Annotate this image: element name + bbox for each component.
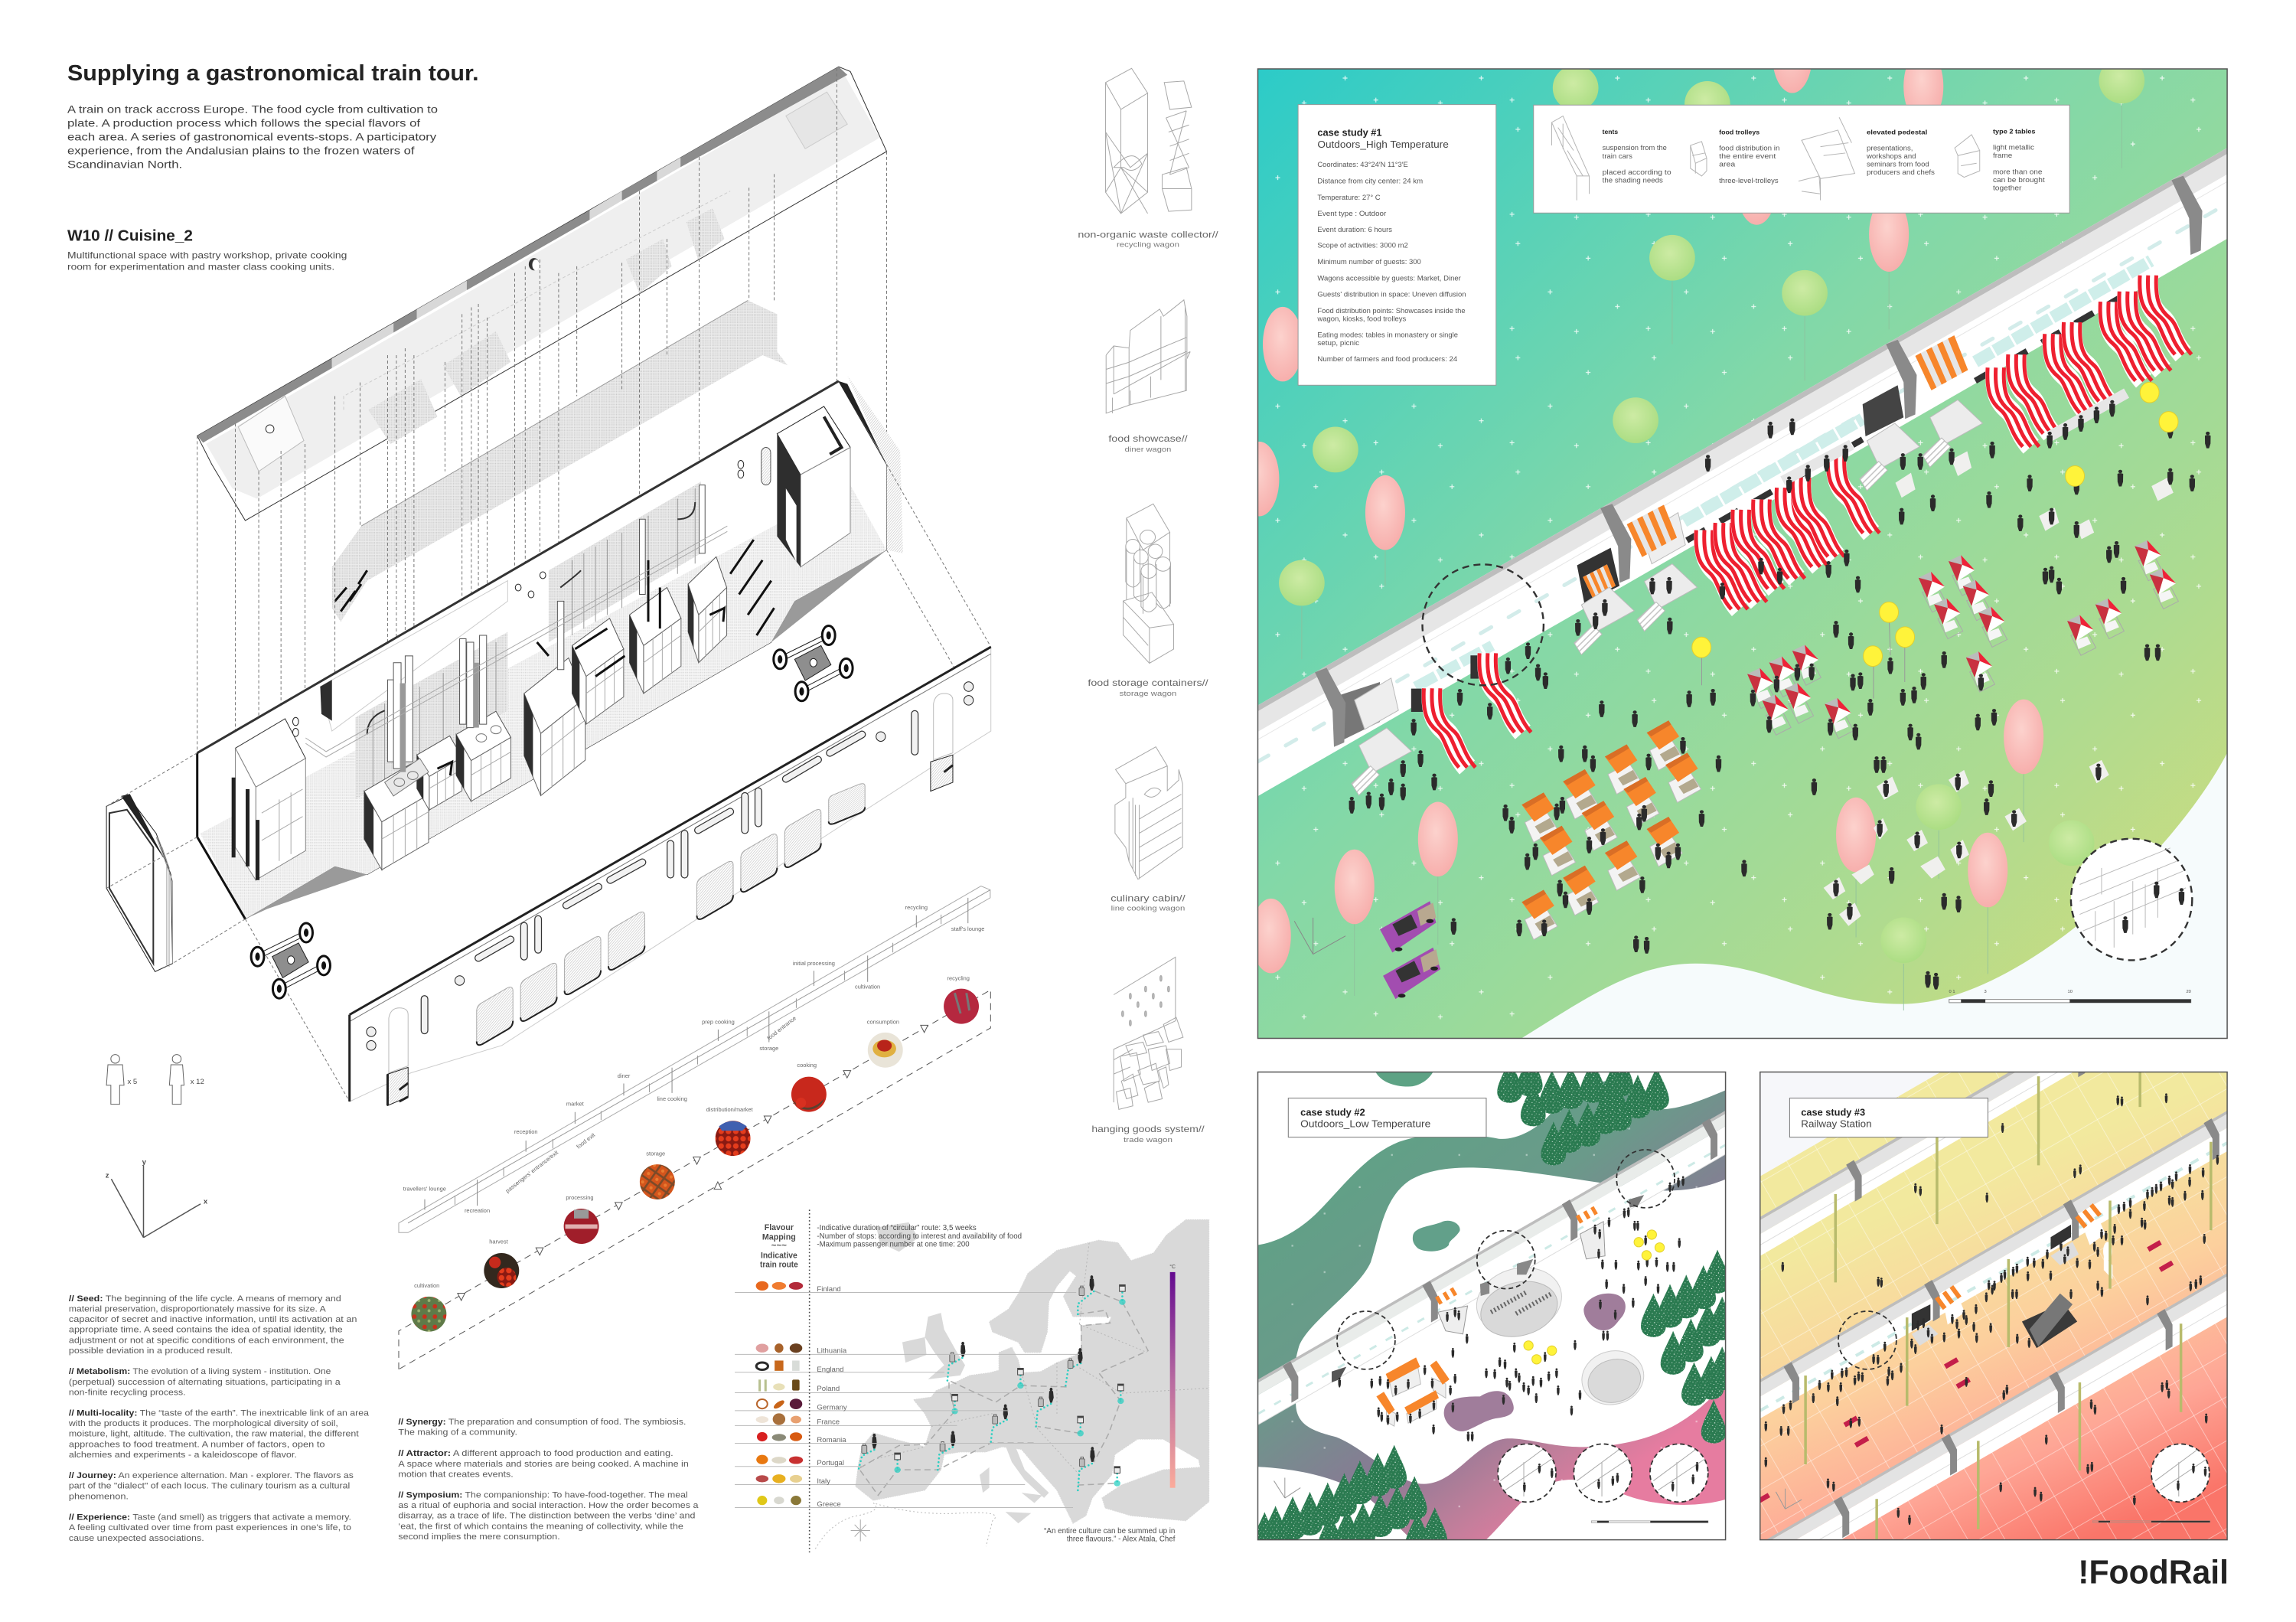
concepts text column 1: appropriate time. A seed contains the idea of spatial identity, the (69, 1326, 343, 1335)
stage: processing (564, 1194, 599, 1244)
balloons (1524, 1230, 1665, 1364)
concepts text column 1: capacitor of secret and inactive information, until its activation at an (69, 1315, 357, 1324)
food cycle path (399, 975, 990, 1369)
item: showcase: diner wagon (1125, 445, 1171, 453)
item: waste collector: recycling wagon (1117, 241, 1179, 249)
stage: processing: processing (566, 1194, 593, 1201)
info card: case study 1: Event duration: 6 hours (1317, 226, 1393, 233)
heading: wagon W10: W10 // Cuisine_2 (67, 228, 193, 245)
scale bar (1592, 1521, 1708, 1522)
long banquet tables (1783, 393, 2127, 481)
item: culinary cabin (1110, 747, 1186, 912)
axes icon: y (142, 1158, 147, 1167)
inset detail (2071, 839, 2192, 960)
item: waste collector: non-organic waste collector// (1078, 230, 1218, 240)
concepts text column 1: part of the "dialect" of each locus. The culinary tourism as a cultural (69, 1482, 350, 1491)
stage: cooking (791, 1062, 827, 1112)
legend card: event components: food trolleys (1719, 128, 1760, 135)
country labels: Lithuania (817, 1347, 847, 1356)
map heading: Mapping (762, 1233, 796, 1242)
country labels: Poland (817, 1385, 840, 1393)
strip labels: recycling (905, 904, 928, 911)
concepts text column 1: A feeling cultivated over time from past experiences in one's life, to (69, 1523, 351, 1532)
legend card: event components: producers and chefs (1867, 168, 1936, 176)
intro text block: A train on track accross Europe. The food cycle from cultivation to (67, 103, 438, 115)
item: culinary cabin: line cooking wagon (1111, 905, 1185, 912)
legend card: event components: three-level-trolleys (1719, 177, 1779, 184)
concepts text column 2: as a ritual of euphoria and social interaction. How the order becomes a (398, 1501, 698, 1510)
end wall (106, 794, 173, 971)
roof shell (197, 67, 886, 521)
concepts text column 1: cause unexpected associations. (69, 1534, 204, 1543)
dashed connection lines (197, 68, 886, 834)
concepts text column 1: material preservation, disproportionately massive for its size. A (69, 1304, 327, 1314)
info card: case study 1 (1298, 105, 1496, 385)
route facts: -Indicative duration of “circular” route: 3,5 weeks (817, 1224, 977, 1232)
row divider lines (735, 1292, 1098, 1508)
station train (1760, 1111, 2227, 1418)
snow ground shapes (1257, 1072, 1725, 1539)
map heading: Flavour (765, 1223, 794, 1232)
info card: case study 2: Outdoors_Low Temperature (1300, 1118, 1430, 1129)
concepts text column 2: // Synergy: The preparation and consumption of food. The symbiosis. (398, 1418, 686, 1427)
info card: case study 1: Food distribution points: Showcases inside the (1317, 307, 1466, 315)
scale bar (2093, 1521, 2210, 1522)
wagon description: room for experimentation and master class cooking units. (67, 261, 334, 272)
axes icon: z (106, 1171, 109, 1180)
item: storage containers: storage wagon (1120, 690, 1176, 697)
wagon programme strip (399, 886, 990, 1232)
extraction pipes (305, 485, 727, 772)
intro text block: each area. A series of gastronomical events-stops. A participatory (67, 131, 436, 143)
route facts: -Maximum passenger number at one time: 200 (817, 1241, 970, 1249)
teal stops (859, 1291, 1122, 1490)
item: showcase (1106, 300, 1190, 453)
map heading (760, 1223, 798, 1269)
intro text block: Scandinavian North. (67, 158, 182, 170)
concepts text column 1: moisture, light, altitude. The cultivation, the raw material, the different (69, 1430, 359, 1439)
concepts text column 1: possible deviation in a produced result. (69, 1346, 233, 1356)
concepts text column 1: approaches to food treatment. A number of factors, open to (69, 1440, 325, 1449)
country labels: France (817, 1418, 840, 1427)
stage: distribution (706, 1106, 754, 1156)
info card: case study 3: case study #3 (1801, 1108, 1865, 1118)
country labels: Finland (817, 1285, 841, 1294)
ground features: kiosks, umbrellas, tables, guests (1294, 393, 2210, 1003)
item: storage containers: food storage containers// (1088, 677, 1208, 688)
info card: case study 1: Guests' distribution in space: Uneven diffusion (1317, 290, 1466, 298)
light poles (1805, 1072, 2211, 1539)
dashed focus ring (1423, 564, 1544, 685)
strip labels: initial processing (793, 960, 835, 967)
info card: case study 1: Number of farmers and food producers: 24 (1317, 355, 1457, 363)
concepts text column 1: adjustment or not at specific conditions of each environment, the (69, 1336, 344, 1345)
item: waste collector (1078, 68, 1218, 249)
route facts: -Number of stops: according to interest and availability of food (817, 1232, 1022, 1241)
ceiling panel (332, 301, 788, 622)
concepts text column 1: alchemies and experiments - a kaleidoscope of flavor. (69, 1451, 297, 1460)
dashed loop (399, 990, 990, 1369)
info card: case study 3: Railway Station (1801, 1118, 1872, 1129)
scale figure: chef x 5: x 5 (127, 1078, 137, 1086)
concepts text column 2: ‘eat, the first of which contains the meaning of collectivity, while the (398, 1522, 683, 1531)
legend card: event components: frame (1993, 152, 2012, 159)
item: hanging goods: hanging goods system// (1091, 1124, 1205, 1134)
legend card: event components: placed according to (1603, 168, 1671, 176)
strip labels: prep cooking (702, 1018, 735, 1025)
strip labels: cultivation (855, 983, 880, 990)
concepts text column 2: // Symposium: The companionship: To have-food-together. The meal (398, 1491, 688, 1500)
scale figure: guest x 12 (169, 1055, 204, 1105)
info card: case study 1: Coordinates: 43°24′N 11°3′E (1317, 161, 1408, 168)
country labels: Germany (817, 1403, 847, 1411)
train (1258, 1111, 1725, 1425)
info card: case study 1: Outdoors_High Temperature (1317, 139, 1449, 150)
dashed focus ring (1838, 1311, 1896, 1369)
axes icon (106, 1158, 208, 1238)
concepts text column 2 (398, 1418, 698, 1542)
panel: case study 1: 3 (1984, 990, 1987, 994)
concepts text column 1 (68, 1294, 369, 1543)
item: hanging goods (1091, 957, 1205, 1144)
interior insets (1498, 1444, 1708, 1502)
forest (1252, 1053, 1735, 1558)
map heading: ~~~ (771, 1242, 787, 1251)
wagon description: Multifunctional space with pastry workshop, private cooking (67, 250, 347, 261)
yellow balloons (1692, 382, 2178, 667)
strip labels: market (566, 1101, 585, 1108)
temperature scale bar (1169, 1264, 1176, 1488)
interior inset (2151, 1444, 2210, 1502)
pink trees (1239, 18, 2043, 973)
country labels: Romania (817, 1436, 846, 1444)
legend card: event components: type 2 tables (1993, 128, 2036, 135)
stage: distribution: distribution/market (706, 1106, 754, 1113)
intro text block: experience, from the Andalusian plains to the frozen waters of (67, 144, 415, 156)
legend card: event components: elevated pedestal (1867, 128, 1927, 135)
stage: consumption: consumption (867, 1018, 899, 1025)
legend card: event components: the shading needs (1603, 176, 1664, 184)
route (859, 1291, 1148, 1495)
stage: harvest: harvest (489, 1238, 509, 1245)
concepts text column 1: // Metabolism: The evolution of a living system - institution. One (69, 1367, 331, 1376)
platforms and pedestals (1352, 400, 1983, 795)
loop arrows (458, 1025, 928, 1301)
wagon description (67, 250, 347, 272)
dotted separator (809, 1209, 810, 1552)
strip labels: storage (759, 1045, 778, 1052)
stage: cultivation (411, 1282, 446, 1332)
legend card: event components: workshops and (1866, 152, 1916, 160)
snow field (1521, 752, 2228, 1039)
legend card: event components: train cars (1603, 152, 1633, 160)
strip labels: travellers' lounge (403, 1186, 446, 1193)
legend card: event components: food distribution in (1719, 145, 1779, 152)
dashed projection lines (106, 465, 991, 1101)
concepts text column 1: with the products it produces. The morphological diversity of soil, (68, 1419, 338, 1428)
info card: case study 1: Wagons accessible by guests: Market, Diner (1317, 274, 1461, 282)
legend card: event components (1534, 105, 2069, 213)
panel: case study 1: 10 (2068, 990, 2073, 994)
route facts (817, 1224, 1022, 1249)
main interior (197, 376, 903, 919)
info card: case study 1: Event type : Outdoor (1317, 210, 1386, 217)
stage: cooking: cooking (797, 1062, 817, 1069)
country labels: Portugal (817, 1459, 844, 1467)
benches (1755, 1240, 2174, 1504)
bogies (251, 626, 853, 998)
title: Supplying a gastronomical train tour. (67, 61, 479, 86)
food stalls (1912, 1206, 2112, 1346)
info card: case study 1: Minimum number of guests: 300 (1317, 258, 1421, 266)
concepts text column 2: The making of a community. (398, 1428, 517, 1438)
tree stems (1302, 104, 2122, 1010)
dashed focus rings (1337, 1150, 1675, 1369)
furniture catalogue (1078, 68, 1218, 1144)
panel: case study 2 (1252, 1053, 1735, 1558)
quote (1044, 1527, 1176, 1544)
concepts text column 1: // Seed: The beginning of the life cycle. A means of memory and (69, 1294, 341, 1304)
item: hanging goods: trade wagon (1124, 1136, 1172, 1144)
strip labels: passengers' entrance/exit (504, 1148, 560, 1194)
legend icons (1552, 116, 1980, 201)
axes (1776, 1489, 1802, 1509)
concepts text column 1: // Multi-locality: The “taste of the earth”. The inextricable link of an area (69, 1408, 369, 1418)
axes (1274, 1477, 1300, 1498)
info card: case study 1: Temperature: 27° C (1317, 194, 1381, 201)
event pavilions (1332, 1195, 1650, 1411)
panel: case study 1: 20 (2187, 990, 2191, 994)
tall service core (777, 406, 850, 567)
info card: case study 1: Distance from city center: 24 km (1317, 178, 1423, 185)
stage: harvest (484, 1238, 519, 1288)
umbrella tables (1747, 540, 2178, 739)
legend card: event components: area (1719, 161, 1735, 168)
item: showcase: food showcase// (1108, 433, 1188, 444)
strip labels: food entrance (766, 1015, 797, 1042)
food trolleys (1521, 720, 1701, 940)
strip outline (399, 886, 990, 1232)
info card: case study 1: Scope of activities: 3000 m2 (1317, 242, 1408, 250)
country labels: Greece (817, 1500, 841, 1509)
orange wagon canopies (1577, 335, 1968, 603)
legend card: event components: presentations, (1867, 145, 1913, 152)
info card: case study 1: case study #1 (1317, 128, 1382, 139)
food trolleys (1376, 1357, 1450, 1426)
strip labels: reception (514, 1128, 538, 1135)
intro text block (67, 103, 438, 170)
pickup trucks (1380, 901, 1440, 999)
item: culinary cabin: culinary cabin// (1110, 893, 1186, 903)
axes icon: x (204, 1198, 208, 1206)
ponds (1413, 1221, 1626, 1431)
legend card: event components: seminars from food (1867, 161, 1929, 168)
strip labels: diner (618, 1072, 631, 1079)
concepts text column 1: non-finite recycling process. (69, 1388, 186, 1397)
info card: case study 3 (1789, 1098, 1988, 1137)
concepts text column 1: // Experience: Taste (and smell) as triggers that activate a memory. (69, 1513, 351, 1522)
panel: case study 1: 0 1 (1949, 990, 1955, 994)
stage: storage: storage (646, 1150, 665, 1157)
passengers (1764, 1093, 2219, 1525)
concepts text column 2: disarray, as a trace of life. The distinction between the verbs ‘dine’ and (398, 1512, 695, 1521)
green trees (1279, 57, 2144, 963)
stage: recycling (944, 975, 979, 1024)
info card: case study 2 (1288, 1098, 1486, 1137)
strip labels (403, 904, 984, 1214)
concepts text column 2: second implies the mere consumption. (398, 1532, 560, 1542)
picnic tables (1824, 451, 2174, 926)
info card: case study 1: wagon, kiosks, food trolleys (1316, 315, 1407, 322)
map heading: Indicative (761, 1252, 797, 1261)
strip labels: line cooking (657, 1095, 687, 1102)
logo: !FoodRail (2078, 1553, 2229, 1591)
legend card: event components: light metallic (1993, 144, 2035, 152)
intro text block: plate. A production process which follows the special flavors of (67, 117, 420, 129)
country labels: Italy (817, 1477, 830, 1486)
info card: case study 1: setup, picnic (1317, 339, 1360, 347)
stage: recycling: recycling (947, 975, 970, 982)
stage: cultivation: cultivation (414, 1282, 439, 1289)
concepts text column 2: // Attractor: A different approach to food production and eating. (398, 1449, 673, 1458)
axes (1294, 918, 1345, 955)
panel: case study 3 (1755, 1036, 2227, 1540)
quote: three flavours.” - Alex Atala, Chef (1067, 1536, 1176, 1544)
kitchen counters (364, 540, 775, 870)
legend card: event components: the entire event (1719, 152, 1776, 160)
guests (1338, 1177, 1684, 1441)
country labels: England (817, 1366, 843, 1374)
lower track train (1766, 1273, 2227, 1539)
scale bar (1949, 1000, 2191, 1003)
outer side wall (350, 647, 991, 1105)
country labels (817, 1285, 847, 1509)
map geography (815, 1220, 1209, 1549)
strip labels: recreation (465, 1207, 490, 1214)
Europe flavour map (735, 1209, 1209, 1552)
stage: storage (640, 1150, 675, 1199)
info card: case study 1: Eating modes: tables in monastery or single (1317, 331, 1458, 338)
legend card: event components: more than one (1993, 168, 2043, 176)
legend card: event components: together (1993, 184, 2022, 192)
strip labels: food exit (575, 1131, 597, 1150)
info card: case study 2: case study #2 (1300, 1108, 1365, 1118)
item: storage containers (1088, 504, 1208, 697)
exploded axonometric of wagon (106, 67, 991, 1105)
concepts text column 1: (perpetual) succession of alternating situations, participating in a (69, 1378, 341, 1387)
stage: consumption (867, 1018, 903, 1068)
food icons (756, 1281, 803, 1505)
striped tents (1424, 276, 2191, 768)
strip labels: staff's lounge (951, 925, 984, 932)
concepts text column 2: motion that creates events. (398, 1470, 514, 1479)
legend card: event components: suspension from the (1603, 144, 1667, 152)
upper track train (1760, 1036, 2085, 1256)
sculpture (2022, 1294, 2077, 1348)
temperature scale bar: °C (1169, 1264, 1176, 1270)
balloons tethers (1701, 617, 1905, 699)
concepts text column 2: A space where materials and stories are being cooked. A machine in (398, 1460, 689, 1469)
quote: “An entire culture can be summed up in (1044, 1527, 1175, 1536)
concepts text column 1: phenomenon. (69, 1492, 129, 1501)
concepts text column 1: // Journey: An experience alternation. Man - explorer. The flavors as (69, 1471, 354, 1480)
scale figure: guest x 12: x 12 (191, 1078, 204, 1086)
legend card: event components: can be brought (1993, 176, 2045, 184)
panel: case study 1 (1239, 18, 2228, 1039)
legend card: event components: tents (1603, 128, 1618, 135)
left storage cabinet (233, 719, 305, 880)
train (1257, 148, 2227, 796)
scale figure: chef x 5 (106, 1055, 137, 1105)
map heading: train route (760, 1260, 798, 1269)
